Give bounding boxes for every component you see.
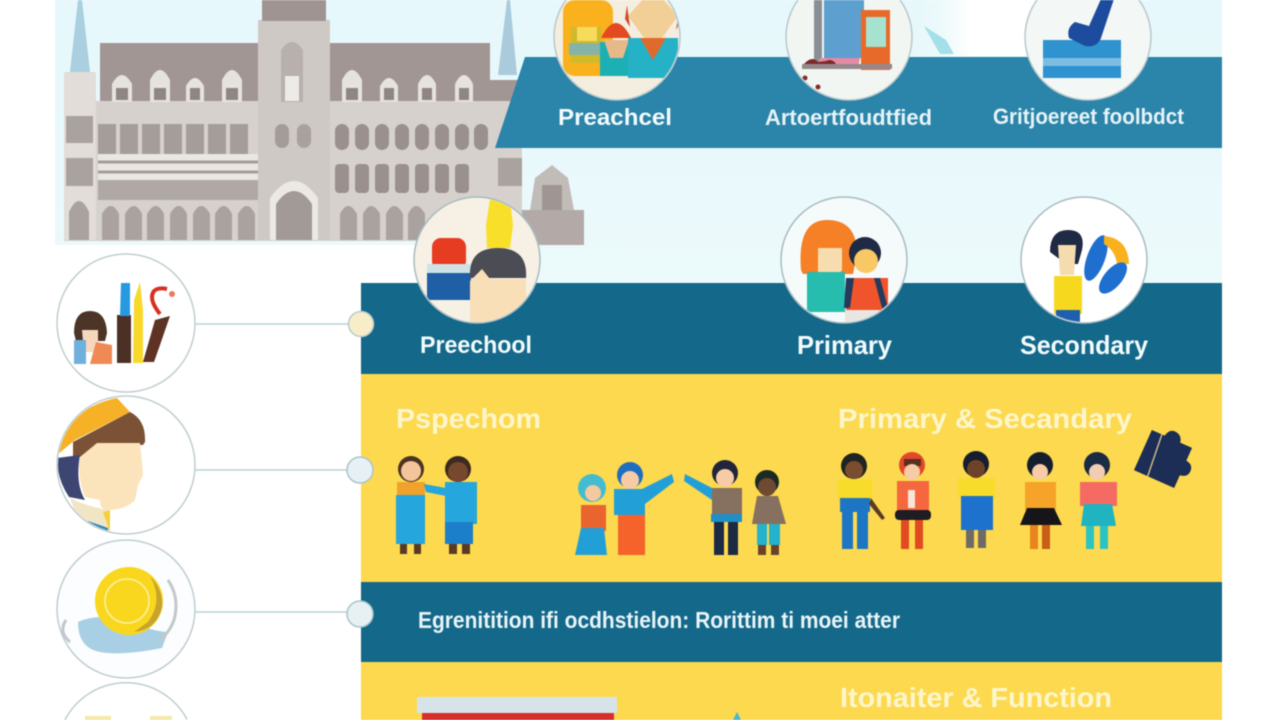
panel: lower yellow [361, 662, 1222, 720]
connector lines [195, 324, 350, 612]
right window rows [335, 124, 488, 193]
icon: secondary circle [1021, 197, 1147, 324]
header band [361, 283, 1222, 374]
side panels [66, 116, 522, 186]
figures: high five group [575, 460, 786, 555]
illustration: town hall building [64, 0, 584, 245]
lower heading: Itonaiter & Function [840, 682, 1112, 713]
teal mark [733, 712, 741, 720]
annex wing [522, 165, 584, 245]
header label secondary: Secondary [1020, 330, 1149, 360]
ground floor arches [69, 201, 425, 240]
top label one: Preachcel [558, 104, 672, 130]
teal shard decoration [924, 26, 954, 54]
header label preschool: Preechool [420, 332, 532, 359]
left tower block [64, 72, 96, 240]
icon: puzzle piece [1134, 423, 1203, 491]
footer teal band [361, 582, 1222, 662]
main facade [64, 101, 522, 241]
heading: preschool group: Pspechom [396, 403, 541, 434]
icon: left circle partial [65, 683, 187, 720]
icon: primary circle [781, 197, 907, 330]
figures: preschool pair [396, 456, 477, 554]
lower illustration: red box [417, 697, 617, 720]
central tower [258, 0, 330, 240]
top band [495, 57, 1222, 148]
left ornate windows [98, 124, 258, 200]
icon: left circle art tools [57, 254, 195, 392]
node three [347, 601, 373, 627]
icon: top circle three [1025, 0, 1151, 100]
left spire [70, 0, 90, 72]
dormer panes [116, 88, 469, 100]
icon: top circle one [554, 0, 682, 100]
dormer windows [112, 70, 473, 102]
icon: preschool circle [414, 197, 540, 325]
node one [348, 312, 374, 336]
roof [64, 43, 522, 105]
right spire [498, 0, 517, 75]
sky background panel [55, 0, 1222, 283]
figures: primary and secondary row [838, 451, 1117, 549]
top label three: Gritjoereet foolbdct [993, 104, 1185, 129]
node two [347, 457, 373, 483]
white haze [910, 0, 1150, 56]
header label primary: Primary [797, 330, 893, 360]
teal band description: Egrenitition ifi ocdhstielon: Rorittim ti moei atter [418, 607, 900, 633]
icon: top circle two [786, 0, 912, 100]
icon: left circle face [57, 396, 195, 540]
top label two: Artoertfoudtfied [765, 105, 932, 130]
panel: yellow groups [361, 374, 1222, 582]
heading: primary and secondary group: Primary & Secandary [838, 403, 1132, 434]
icon: left circle coin [57, 540, 195, 678]
